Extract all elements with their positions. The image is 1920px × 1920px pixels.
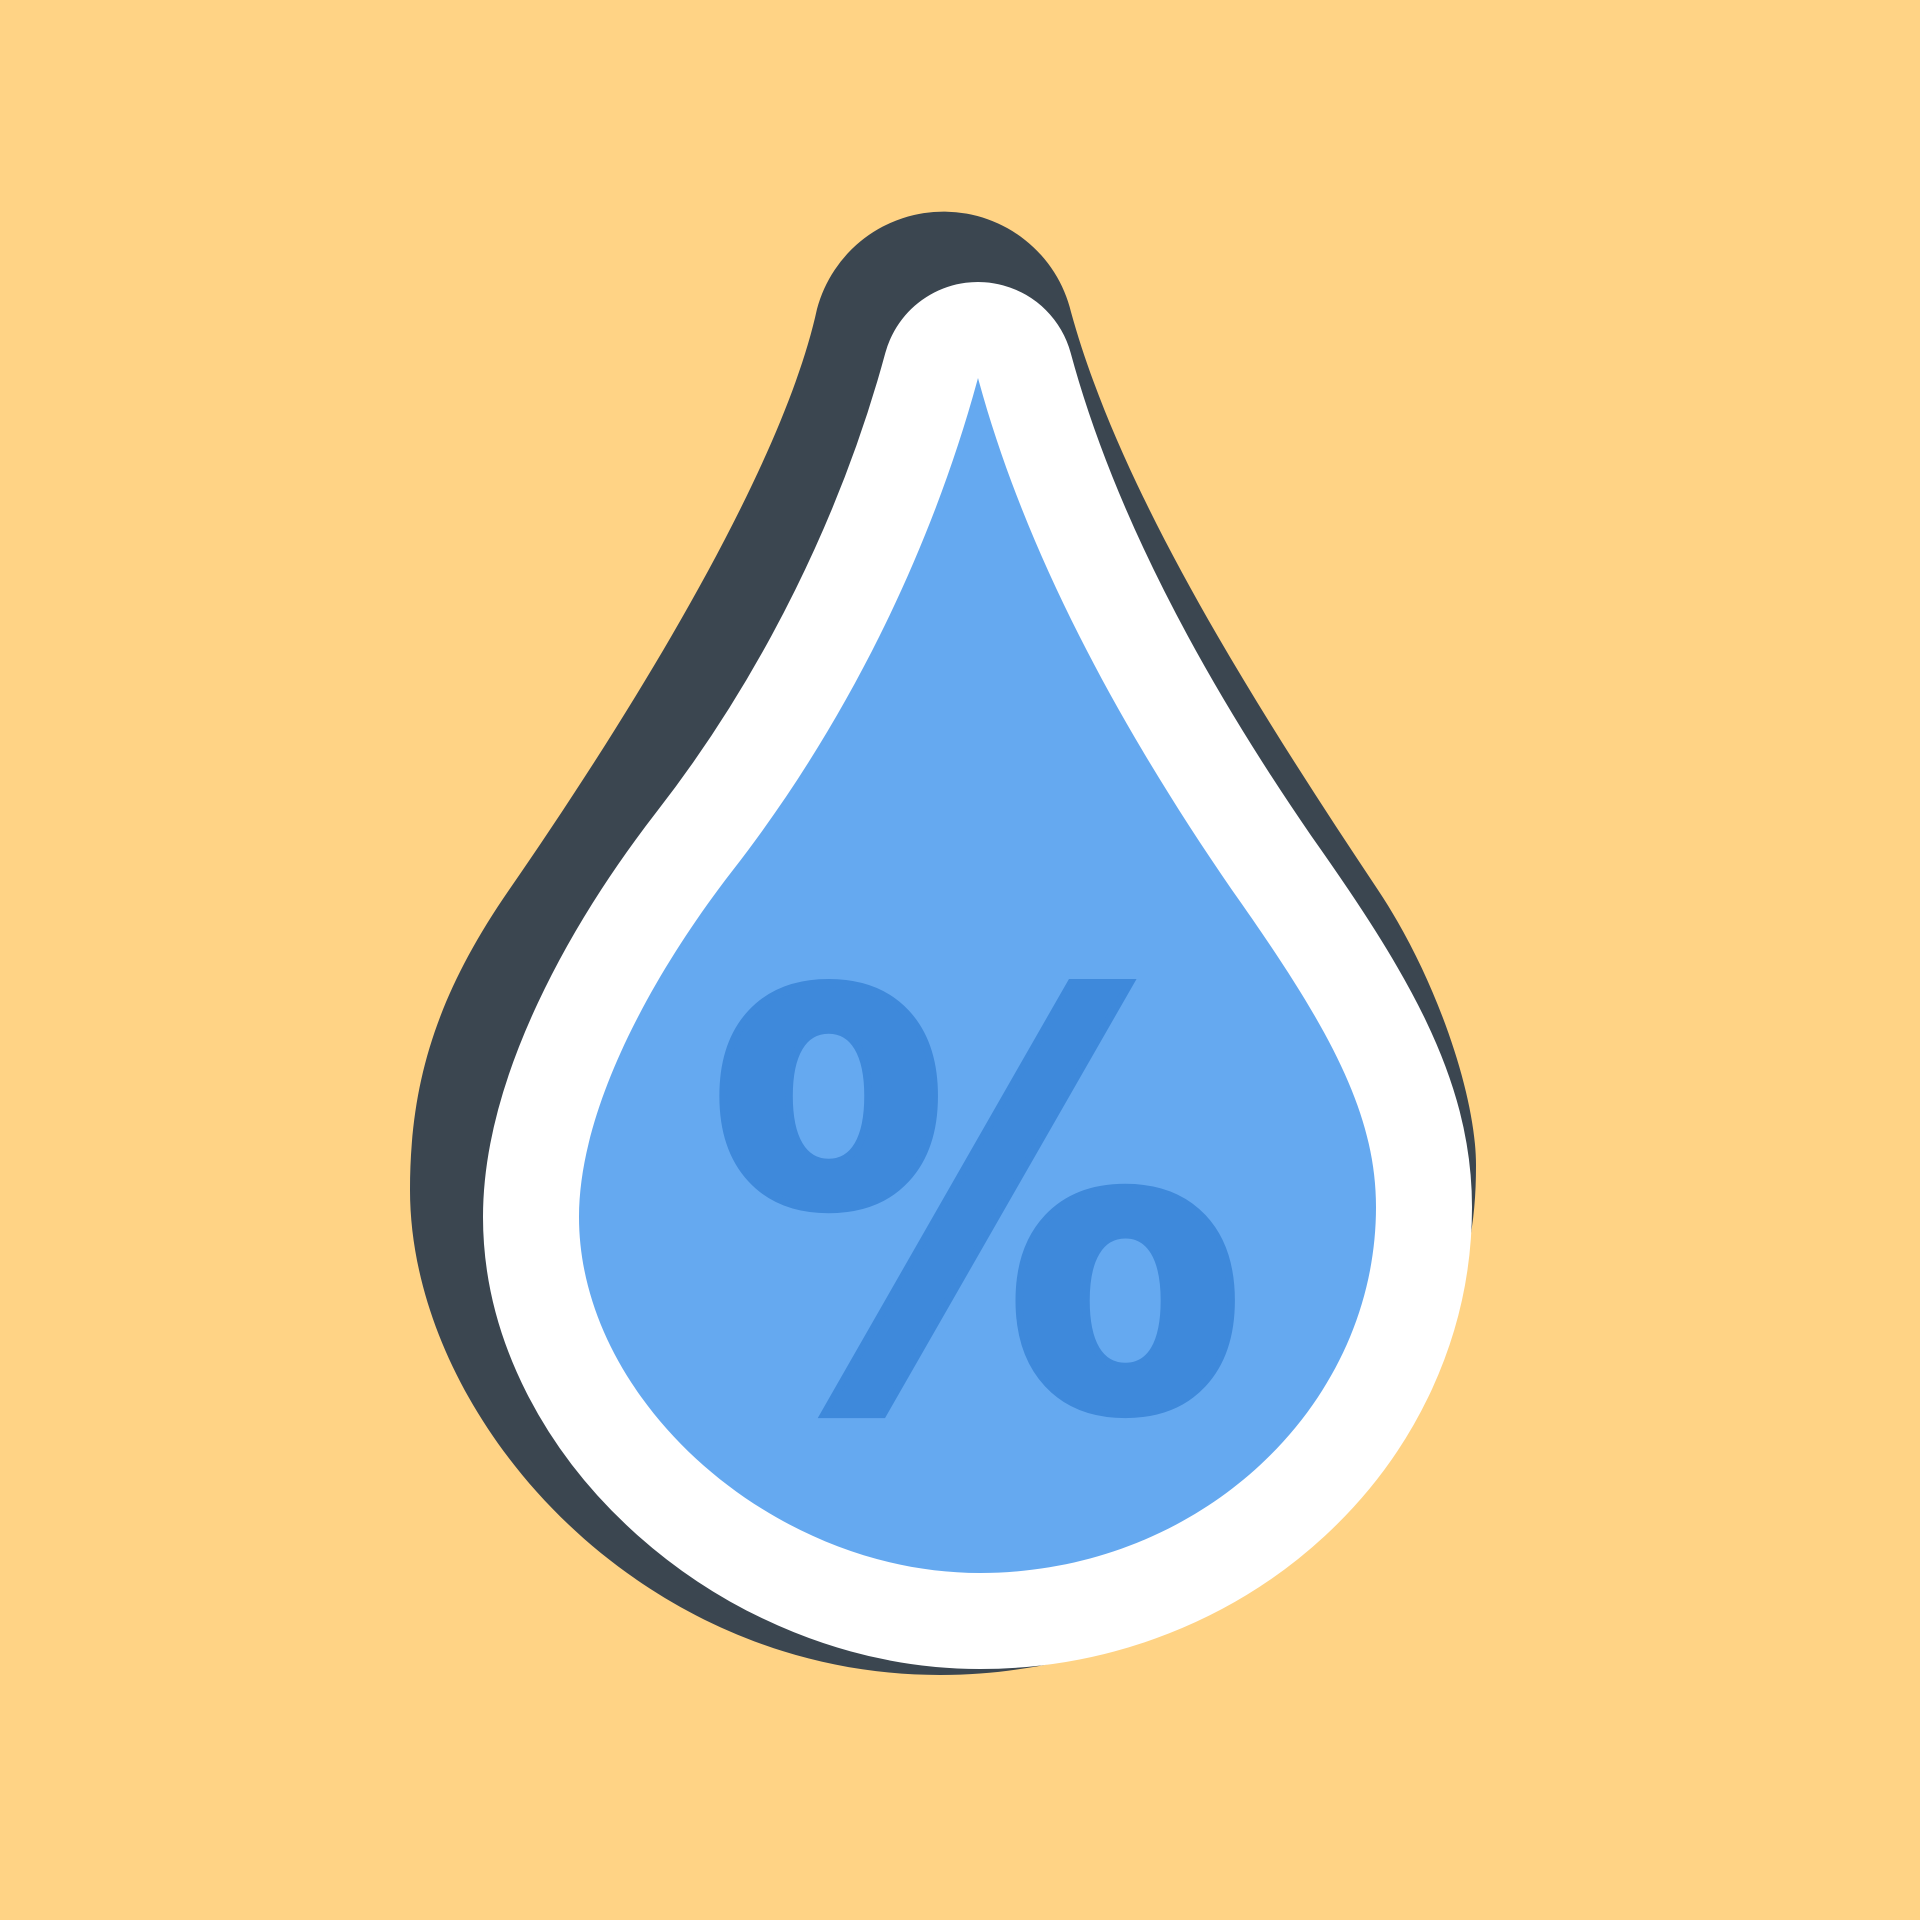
icon: drop shadow layer [410, 212, 1476, 1675]
icon: white sticker outline [579, 378, 1376, 1573]
icon: blue water drop [579, 378, 1376, 1573]
percent symbol: % [706, 878, 1248, 1541]
